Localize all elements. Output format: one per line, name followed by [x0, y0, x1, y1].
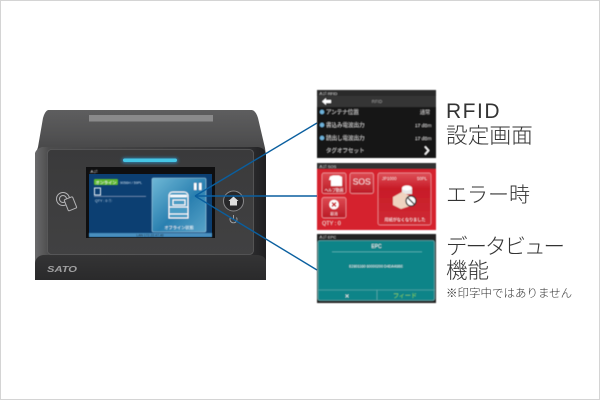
rows: 17 dBm [415, 123, 432, 129]
control panel [48, 150, 254, 254]
screen: data view: ᗑ⇌ EPC [319, 234, 336, 240]
screen: data view: フィード [393, 293, 417, 300]
brand logo: SATO [47, 265, 78, 274]
screen: error [317, 163, 436, 230]
icon: power [230, 215, 237, 223]
divider [94, 195, 146, 198]
heading: EPC [371, 244, 382, 250]
label: data view: データビュー [446, 235, 563, 259]
online badge: オンライン [96, 180, 116, 186]
label: on error: エラー時 [446, 184, 530, 207]
screen: RFID settings: ᗑ⇌ RFID [319, 90, 337, 96]
rows: 読出し電波出力 [326, 134, 365, 142]
counter text: 9056H / 59PL [120, 181, 142, 185]
header [317, 96, 436, 107]
label: RFID settings [446, 100, 533, 148]
status light [122, 158, 178, 163]
button row [318, 290, 435, 300]
rows: アンテナ位置 [326, 108, 359, 116]
rows: タグオフセット [326, 146, 365, 154]
icon: paper roll and stack [402, 188, 412, 194]
EPC value: E2801160 60000200 D4DA46BE [349, 264, 403, 268]
printer front body [35, 147, 266, 280]
printer [35, 110, 266, 280]
label: data view [446, 235, 563, 283]
icon: printer [169, 192, 188, 218]
printer base band [35, 255, 266, 280]
screen: RFID settings [317, 90, 436, 158]
bottom status bar: LAN 172.22.47.40 [136, 234, 164, 238]
error message panel: JP1000 [382, 176, 397, 181]
error message panel [378, 173, 431, 225]
icon: home button [224, 191, 244, 211]
screen: RFID settings: RFID [372, 99, 383, 104]
error message panel: 50PL [417, 176, 428, 181]
error message panel: 用紙がなくなりました [385, 216, 425, 222]
offline button: オフライン状態 [164, 224, 194, 231]
label: RFID settings: RFID [446, 100, 501, 123]
quantity text: QTY : 0 ① [95, 198, 112, 203]
SOS button: SOS [353, 176, 371, 186]
screen: data view [317, 234, 436, 303]
quantity: QTY : 0 [322, 221, 341, 227]
note: ※印字中ではありません [446, 288, 572, 300]
label: data view: 機能 [446, 259, 489, 283]
status bar icons: ᗑ⇌ [90, 168, 98, 174]
top cover slot [89, 115, 213, 122]
icon: label [94, 188, 100, 195]
rows: 書込み電波出力 [326, 121, 365, 129]
screen: error: ᗑ⇌ SOS [319, 163, 337, 169]
screen: data view: ✕ [345, 294, 350, 300]
connector lines [195, 123, 317, 270]
touch screen [86, 167, 215, 238]
icon: pause [194, 183, 196, 190]
printer top cover [35, 110, 266, 156]
cancel button: 取消 [330, 211, 338, 216]
label: RFID settings: 設定画面 [446, 123, 533, 148]
help button: ヘルプ動画 [325, 188, 344, 192]
rows [320, 108, 432, 154]
icon: NFC [56, 192, 77, 211]
rows: 17 dBm [415, 136, 432, 142]
rows: 通常 [420, 109, 430, 116]
